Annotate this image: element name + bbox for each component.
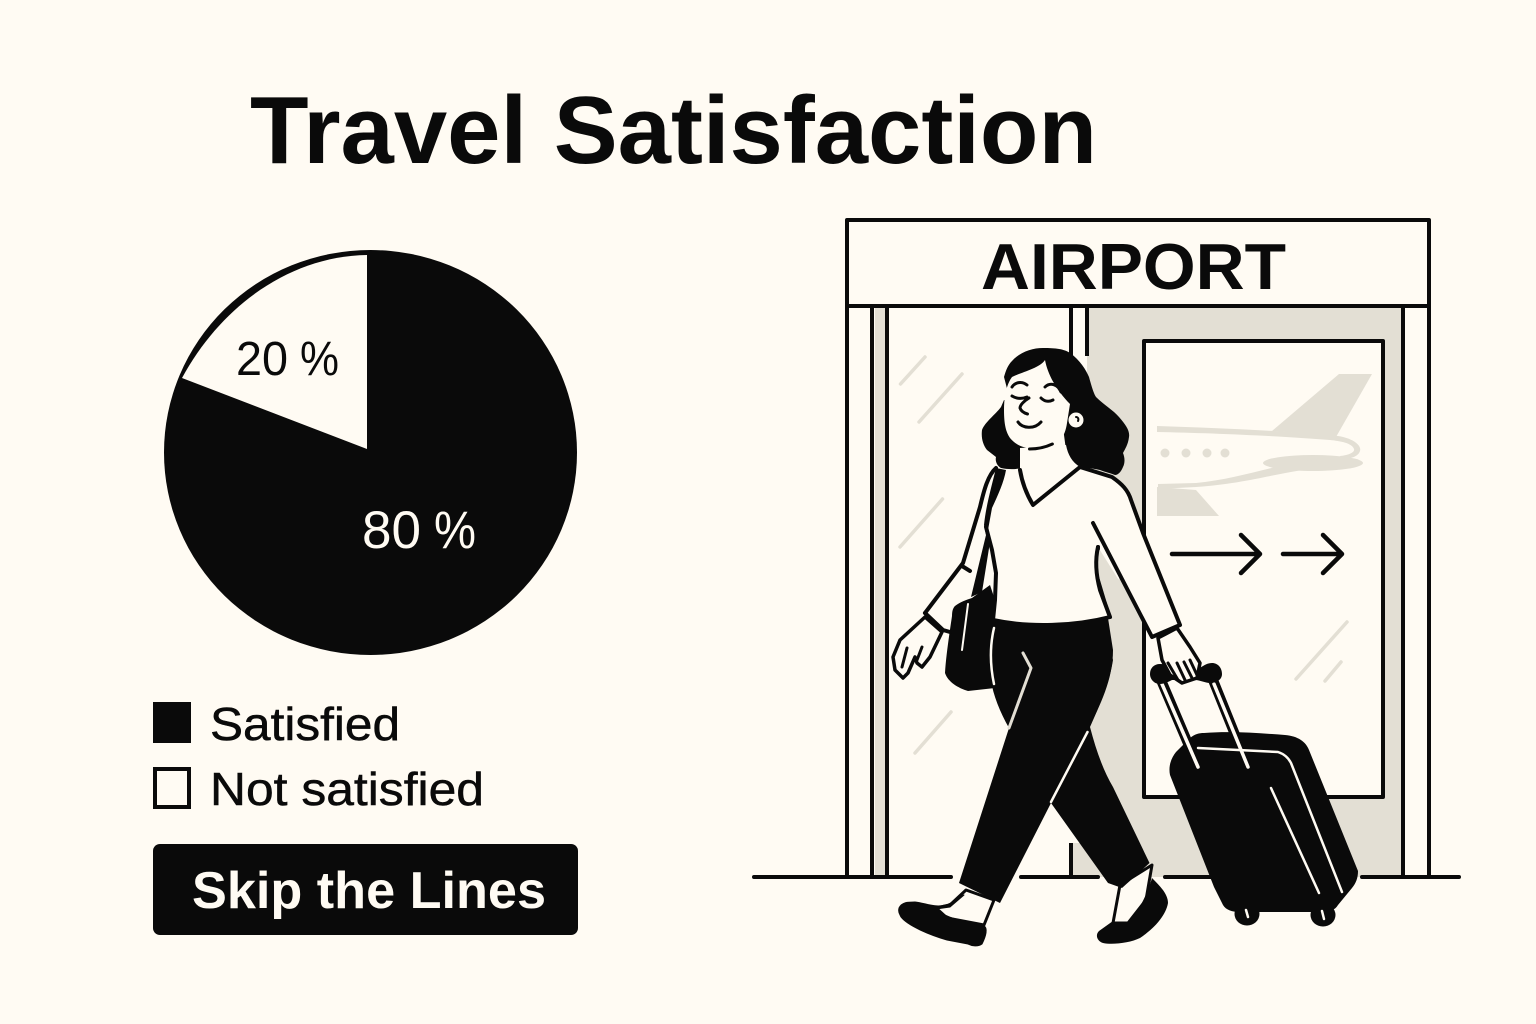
legend swatch: not satisfied bbox=[155, 769, 189, 807]
left sleeve and strap lines bbox=[925, 468, 996, 613]
right foot and shoe bbox=[1097, 865, 1168, 944]
collar bbox=[1020, 467, 1080, 505]
traveller figure bbox=[893, 348, 1358, 946]
torso sweater bbox=[986, 465, 1143, 625]
bag highlight bbox=[962, 604, 968, 650]
door frame lines bbox=[847, 306, 1429, 877]
arrows bbox=[1172, 535, 1342, 573]
trouser creases bbox=[1051, 732, 1088, 802]
beige gap between arm and torso bbox=[1097, 547, 1135, 617]
trousers bbox=[959, 618, 1150, 903]
suitcase wheels bbox=[1234, 902, 1260, 926]
bag strap bbox=[971, 468, 1006, 597]
airport building bbox=[754, 220, 1459, 877]
sign bbox=[847, 220, 1429, 306]
face bbox=[1004, 360, 1070, 448]
label: 20%: % bbox=[300, 333, 339, 386]
beige wall bbox=[875, 308, 1401, 877]
suitcase highlights bbox=[1198, 748, 1342, 919]
handbag bbox=[945, 585, 995, 691]
left hand bbox=[893, 617, 942, 678]
button: skip the lines: Skip the Lines bbox=[192, 862, 546, 920]
legend bbox=[153, 698, 484, 815]
title: Travel Satisfaction bbox=[250, 77, 1097, 184]
sign text: AIRPORT: AIRPORT bbox=[981, 230, 1286, 303]
right hand bbox=[1158, 628, 1200, 683]
hair bbox=[982, 348, 1129, 475]
bag seam highlight bbox=[991, 628, 994, 684]
pie chart bbox=[164, 250, 577, 655]
pie slice: not satisfied 20% bbox=[182, 255, 367, 449]
window panel bbox=[1144, 341, 1383, 797]
glass reflections bbox=[900, 357, 1347, 753]
left cuff bbox=[925, 613, 950, 632]
back leg bbox=[1051, 640, 1150, 888]
icon: airplane bbox=[1157, 374, 1372, 516]
arrow 2 bbox=[1283, 535, 1342, 573]
label: 80%: 80 bbox=[362, 501, 421, 560]
pie slice: satisfied 80% bbox=[164, 250, 577, 655]
suitcase handle rods bbox=[1161, 680, 1248, 767]
arrow 1 bbox=[1172, 535, 1260, 573]
button: skip the lines bbox=[153, 844, 578, 935]
left hand finger lines bbox=[902, 647, 922, 667]
front leg bbox=[959, 618, 1113, 903]
neck bbox=[1020, 445, 1080, 505]
suitcase bbox=[1150, 663, 1358, 926]
ear bbox=[1068, 412, 1084, 428]
legend label: satisfied: Satisfied bbox=[210, 698, 400, 750]
legend label: not satisfied: Not satisfied bbox=[210, 763, 484, 815]
label: 80%: % bbox=[434, 501, 476, 560]
facial features bbox=[1012, 383, 1061, 449]
torso outline bbox=[986, 527, 1110, 625]
left foot and shoe bbox=[899, 890, 994, 946]
right arm sleeve bbox=[1092, 475, 1180, 637]
label: 20%: 20 bbox=[236, 333, 288, 386]
handle rod highlights bbox=[1162, 684, 1248, 767]
legend swatch: satisfied bbox=[153, 702, 191, 743]
right hand finger lines bbox=[1168, 660, 1197, 680]
handle grip bbox=[1150, 663, 1222, 684]
ground line bbox=[754, 875, 1459, 879]
